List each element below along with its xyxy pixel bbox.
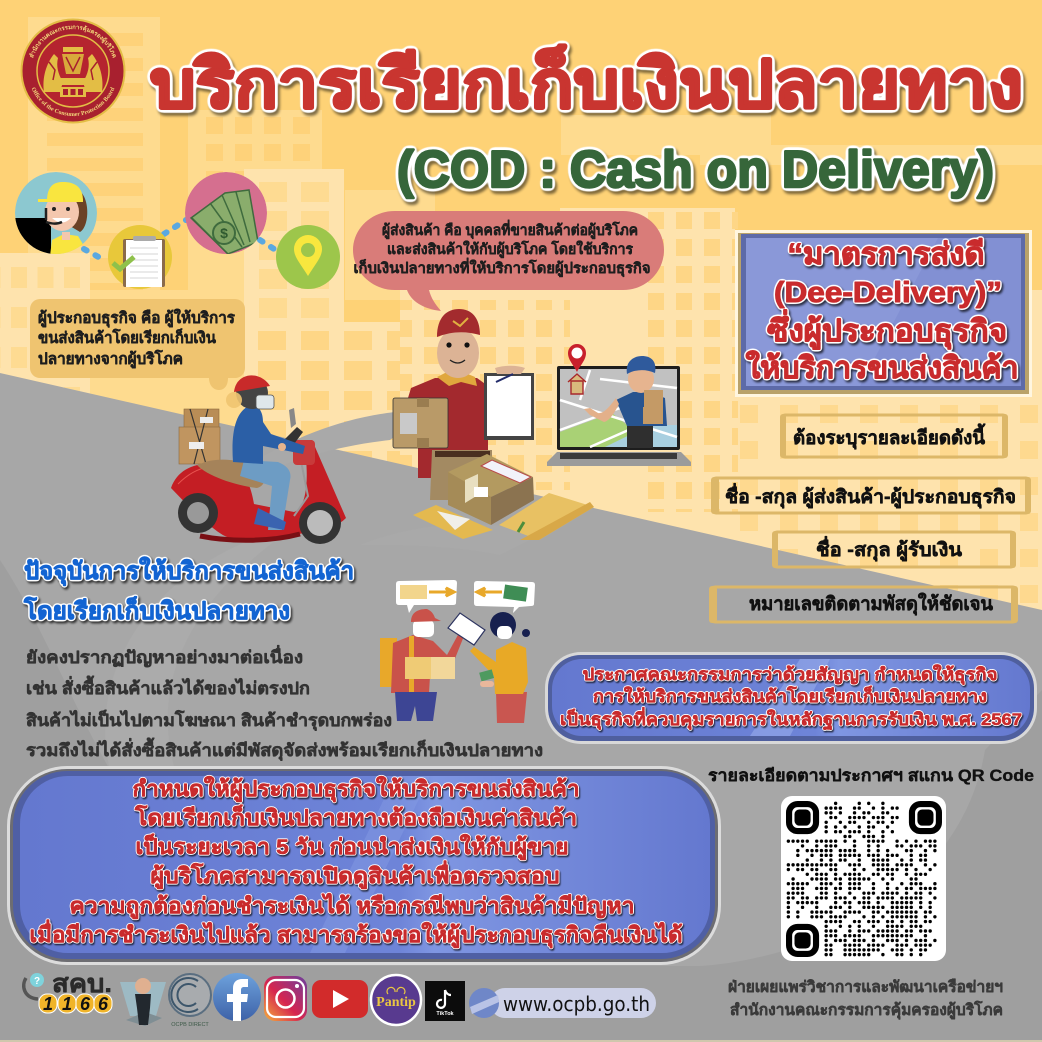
hotline 1166: 6 [98,994,109,1014]
text block: problems: เช่น สั่งซื้อสินค้าแล้วได้ของไม่ตรงปก [26,675,310,698]
customer [470,612,530,723]
panel: 5-day holding rule pill: เป็นระยะเวลา 5 วัน ก่อนนำส่งเงินให้กับผู้ขาย [136,832,568,861]
panel: announcement pill [545,652,1037,744]
heading: current COD problem: ปัจจุบันการให้บริการขนส่งสินค้า [24,556,354,587]
panel: Dee-Delivery measure: ซึ่งผู้ประกอบธุรกิจ [767,309,1007,350]
icon: banknotes [185,172,267,254]
panel: 5-day holding rule pill: ความถูกต้องก่อนชำระเงินได้ หรือกรณีพบว่าสินค้ามีปัญหา [70,893,634,920]
OCPB direct logo: OCPB DIRECT [171,1022,209,1028]
detail box: payee name: ชื่อ -สกุล ผู้รับเงิน [816,536,962,562]
scooter body [171,440,346,540]
illustration: delivery man with parcels [393,309,594,540]
padded envelope [499,493,594,540]
hotline 1166: สคบ. [52,970,112,998]
text block: problems: ยังคงปรากฏปัญหาอย่างมาต่อเนื่อง [26,645,303,668]
clipboard [484,366,534,440]
heading: current COD problem [23,556,354,625]
footer: contact and social icons [24,970,656,1028]
cardboard box [448,454,534,525]
speech bubble: parcel [396,580,457,613]
callout: business operator definition: ปลายทางจากผู้บริโภค [38,349,183,370]
map pin [568,344,586,372]
illustration: courier hands parcel to customer [380,580,535,723]
icon: facebook [213,973,261,1021]
hotline 1166: ? [34,976,40,987]
wheels [178,493,341,544]
flat envelope [413,505,493,539]
icon: pantip [371,975,421,1025]
courier [380,609,464,721]
panel: 5-day holding rule pill: เมื่อมีการชำระเงินไปแล้ว สามารถร้องขอให้ผู้ประกอบธุรกิจคืนเงินได้ [30,919,682,949]
logo: OCPB seal: สำนักงานคณะกรรมการคุ้มครองผู้บริโภค [29,26,116,58]
callout: sender definition: และส่งสินค้าให้กับผู้บริโภค โดยใช้บริการ [387,240,633,258]
panel: announcement pill: เป็นธุรกิจที่ควบคุมรายการในหลักฐานการรับเงิน พ.ศ. 2567 [560,707,1022,731]
logo: OCPB seal [20,18,126,124]
illustration: laptop with courier on screen [547,344,691,466]
icon: pantip: Pantip [376,995,416,1010]
head and cap [437,309,480,378]
website address: www.ocpb.go.th [503,992,650,1016]
text block: problems: สินค้าไม่เป็นไปตามโฆษณา สินค้าชำรุดบกพร่อง [26,708,392,731]
panel: 5-day holding rule pill: ผู้บริโภคสามารถเปิดดูสินค้าเพื่อตรวจสอบ [150,860,560,890]
QR code [781,796,946,961]
panel: announcement pill: การให้บริการขนส่งสินค้าโดยเรียกเก็บเงินปลายทาง [593,684,987,706]
icon: instagram [264,976,307,1021]
icon: tiktok: TikTok [436,1011,455,1017]
dotted connector [84,220,274,260]
courier [584,356,667,448]
callout: sender definition [353,211,664,311]
icon: location pin [276,225,340,289]
callout: business operator definition: ขนส่งสินค้าโดยเรียกเก็บเงิน [38,327,216,347]
detail box: tracking number [709,586,1018,623]
speech bubble: cash [474,581,535,613]
heading: current COD problem: โดยเรียกเก็บเงินปลายทาง [23,596,290,625]
panel: Dee-Delivery measure: “มาตรการส่งดี [788,238,984,271]
clipboard [448,613,485,645]
rider [226,375,305,530]
mascot [120,978,166,1026]
icon: call-centre woman [15,172,97,258]
hotline 1166: 6 [80,994,91,1014]
text block: problems: รวมถึงไม่ได้สั่งซื้อสินค้าแต่มีพัสดุจัดส่งพร้อมเรียกเก็บเงินปลายทาง [26,737,543,761]
detail box: sender and operator name: ชื่อ -สกุล ผู้ส่งสินค้า-ผู้ประกอบธุรกิจ [725,483,1016,509]
panel: 5-day holding rule pill: กำหนดให้ผู้ประกอบธุรกิจให้บริการขนส่งสินค้า [132,775,580,803]
callout: sender definition: เก็บเงินปลายทางที่ให้บริการโดยผู้ประกอบธุรกิจ [354,257,650,277]
background: grey diagonal ground [0,373,1042,1042]
panel: 5-day holding rule pill [7,766,721,965]
credit text [728,978,1003,1021]
OCPB direct logo [169,974,211,1028]
icon: tiktok [425,981,465,1021]
panel: Dee-Delivery measure: ให้บริการขนส่งสินค้า [746,350,1018,385]
detail box: tracking number: หมายเลขติดตามพัสดุให้ชัดเจน [749,592,993,616]
callout: sender definition: ผู้ส่งสินค้า คือ บุคคลที่ขายสินค้าต่อผู้บริโภค [382,219,638,239]
text block: problems [26,645,543,761]
callout: business operator definition [30,299,245,390]
hotline 1166: 1 [43,994,53,1014]
credit text: ฝ่ายเผยแพร่วิชาการและพัฒนาเครือข่ายฯ [728,978,1003,996]
credit text: สำนักงานคณะกรรมการคุ้มครองผู้บริโภค [730,1000,1003,1021]
icon: youtube [312,980,368,1018]
logo: OCPB seal: Office of the Consumer Protection Board [32,87,114,116]
process icons row [15,172,340,289]
held box [393,398,448,448]
detail box: required details [780,414,1008,458]
icon: banknotes: $ [220,225,228,241]
website address [469,988,656,1018]
detail box: payee name [772,531,1016,568]
subtitle: (COD : Cash on Delivery) [397,141,994,199]
trousers [430,450,492,500]
panel: Dee-Delivery measure [735,230,1032,397]
hotline 1166 [24,970,112,1014]
hotline 1166: 1 [62,994,72,1014]
house [568,374,586,394]
callout: business operator definition: ผู้ประกอบธุรกิจ คือ ผู้ให้บริการ [38,308,236,329]
panel: announcement pill: ประกาศคณะกรรมการว่าด้วยสัญญา กำหนดให้ธุรกิจ [582,664,998,685]
illustration: scooter rider with parcels [171,375,346,544]
QR caption: รายละเอียดตามประกาศฯ สแกน QR Code [708,766,1034,785]
shirt [396,378,488,478]
icon: clipboard [108,225,172,289]
panel: 5-day holding rule pill: โดยเรียกเก็บเงินปลายทางต้องถือเงินค่าสินค้า [134,803,577,830]
title: บริการเรียกเก็บเงินปลายทาง [150,44,1023,121]
detail box: required details: ต้องระบุรายละเอียดดังนี้ [793,423,986,450]
detail box: sender and operator name [711,477,1031,514]
parcels [179,409,220,464]
panel: Dee-Delivery measure: (Dee-Delivery)” [774,277,1002,309]
